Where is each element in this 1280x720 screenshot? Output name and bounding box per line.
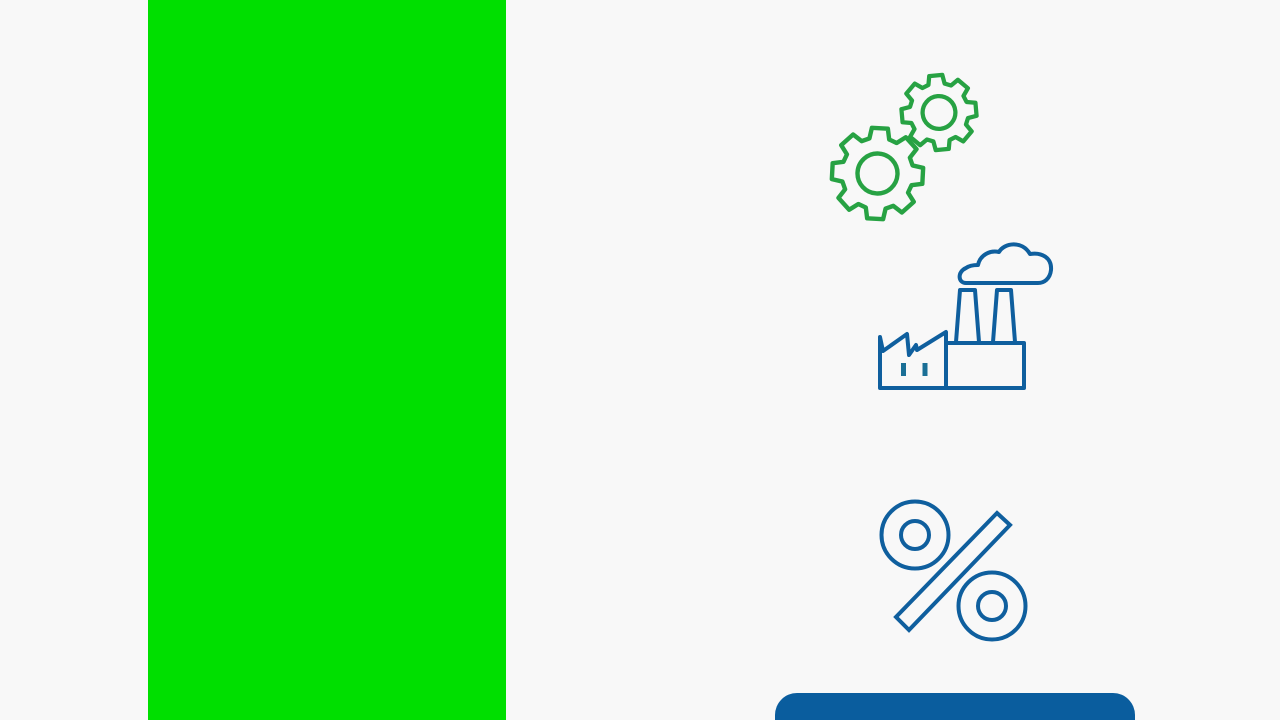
button: blue bar cropped at bottom (775, 693, 1135, 720)
icon: percent sign (882, 502, 1026, 640)
icon: small gear (899, 72, 979, 153)
icon: percent bottom circle (958, 572, 1026, 640)
icon: chimneys (956, 290, 1015, 342)
icon: large gear (830, 126, 925, 221)
icon: factory windows (904, 363, 925, 376)
panel: green placeholder block (148, 0, 506, 720)
icon: cloud (960, 244, 1051, 283)
icon: factory building (880, 332, 1024, 388)
icon: factory with cloud (880, 244, 1051, 388)
icon: gears (830, 72, 979, 221)
icon: percent top circle (882, 502, 948, 568)
icon: percent slash (896, 513, 1010, 630)
